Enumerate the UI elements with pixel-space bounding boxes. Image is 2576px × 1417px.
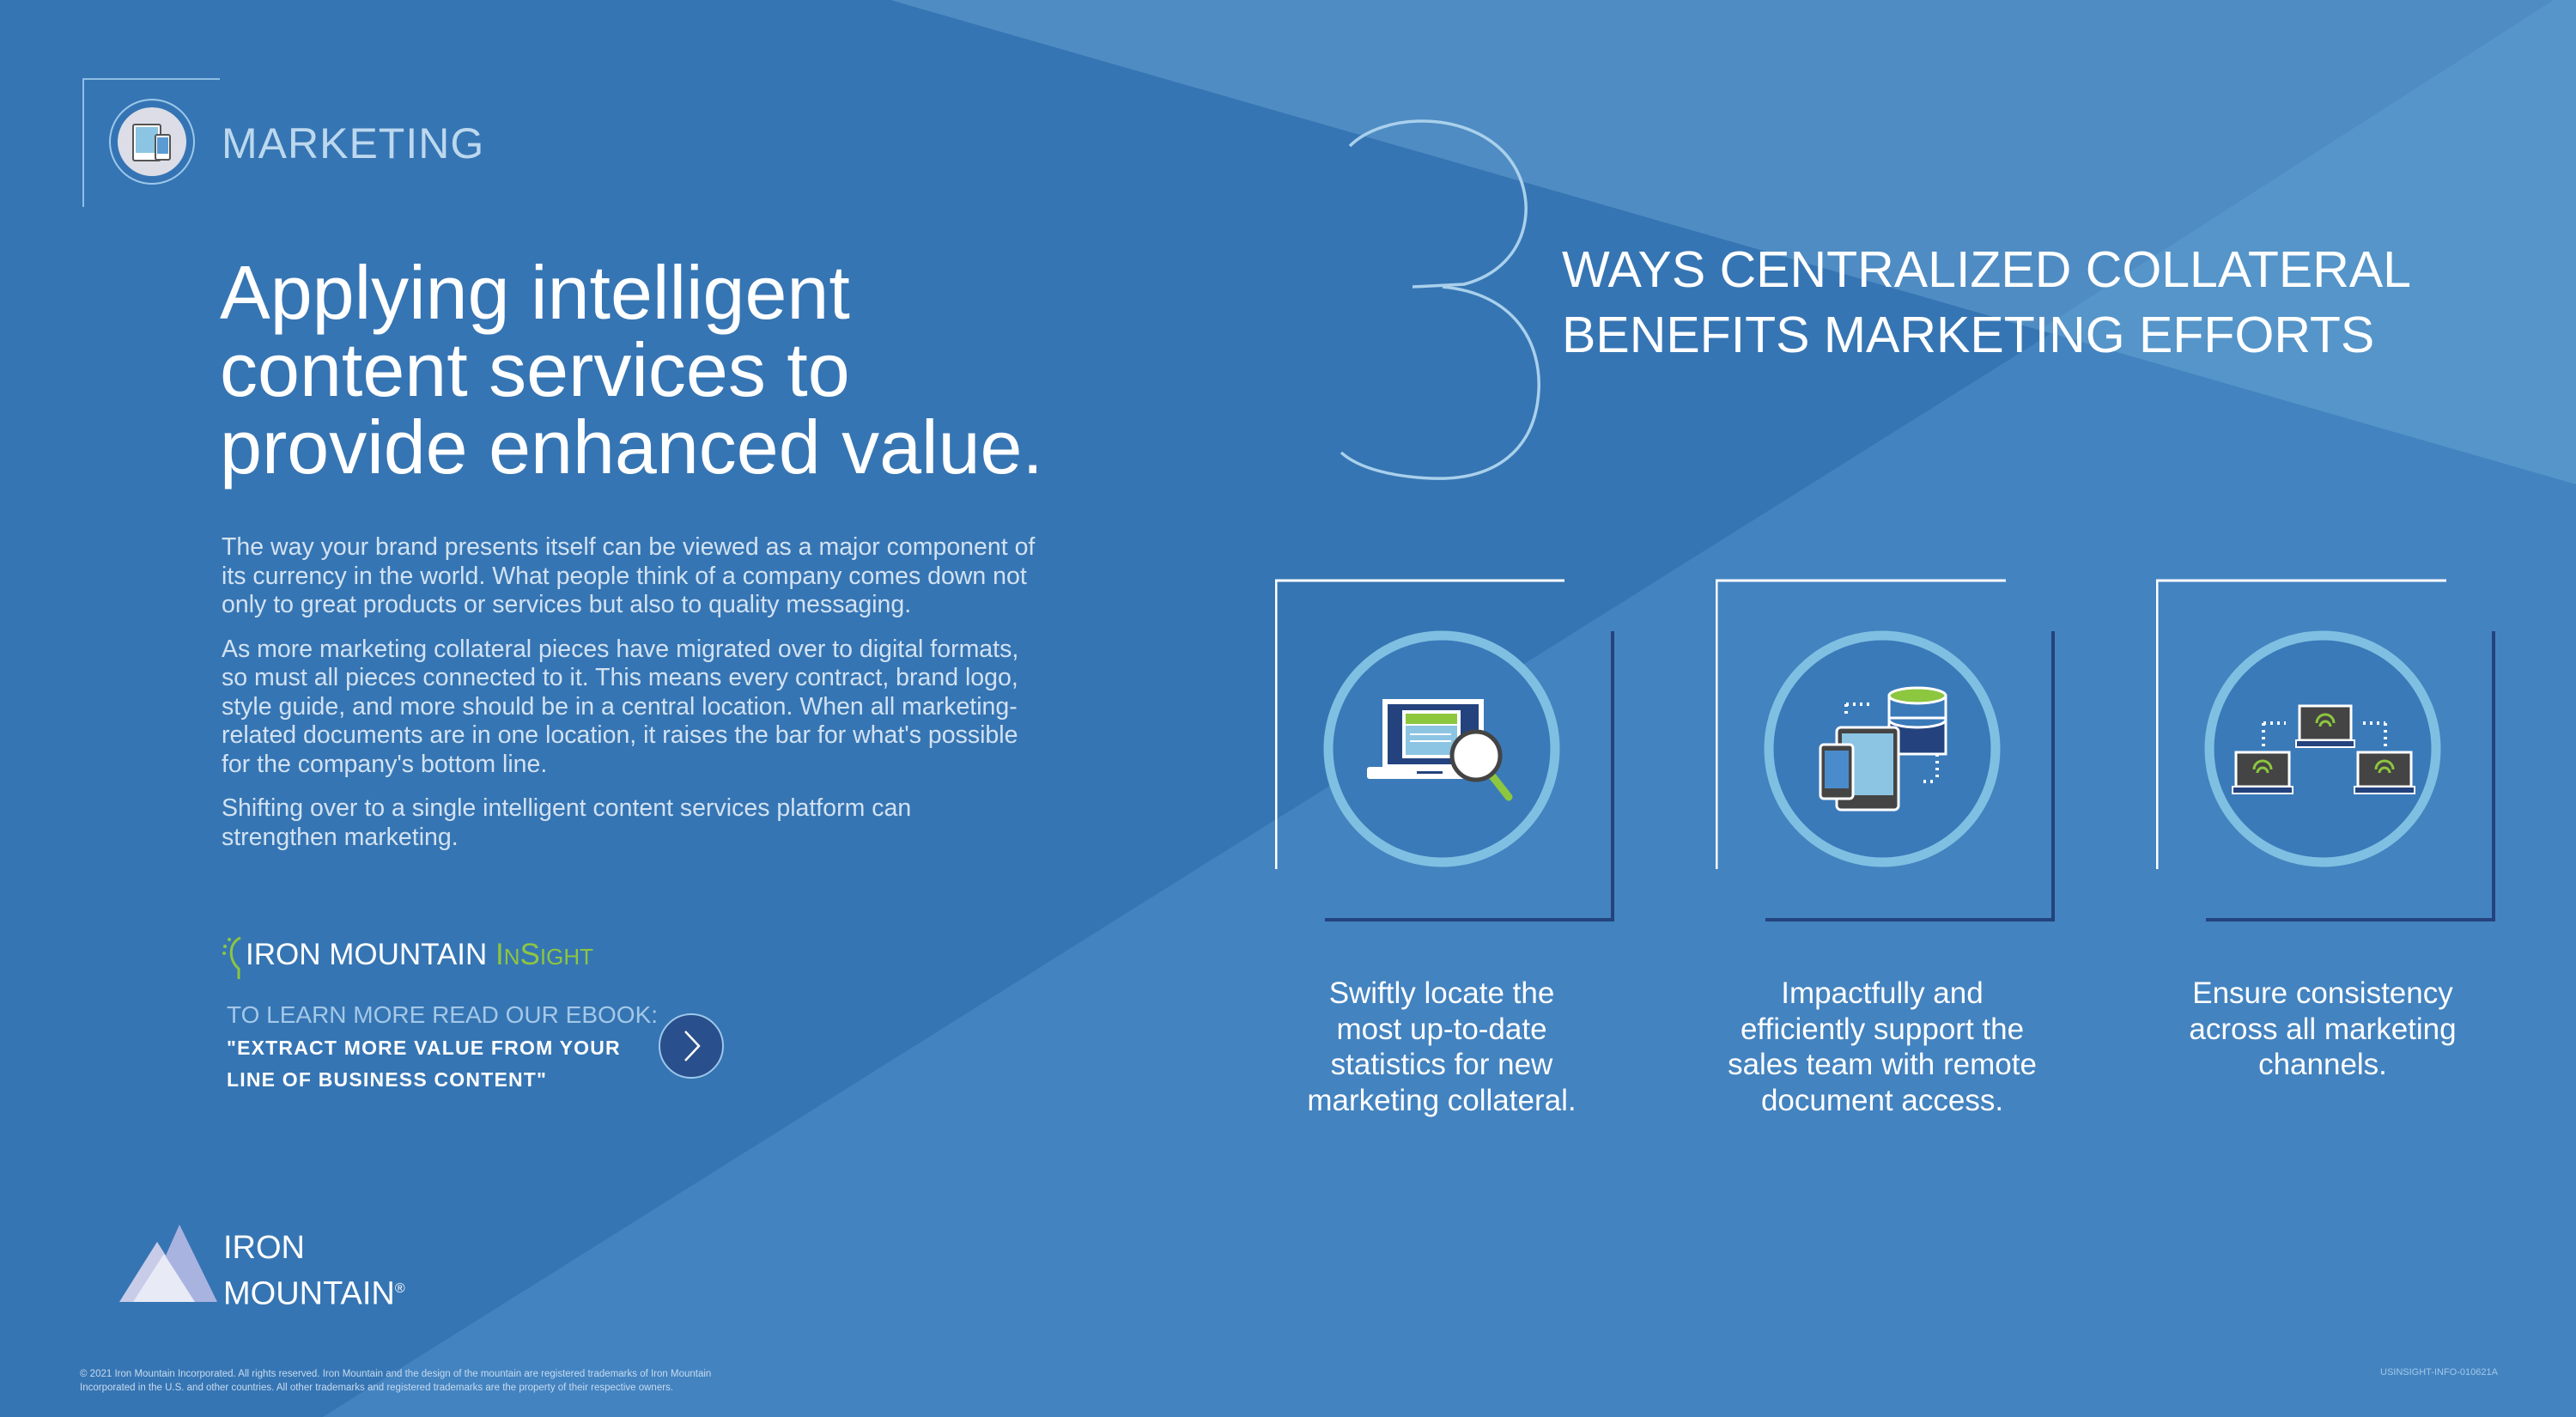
header bracket [82,78,220,207]
body text [222,533,1036,850]
card 1 text [1307,976,1577,1116]
paragraph 2: so must all pieces connected to it. This means every contract, brand logo, [222,664,1018,691]
paragraph 2 [222,636,1018,778]
paragraph 1: only to great products or services but also to quality messaging. [222,591,911,618]
icon: devices and database [1820,688,1946,810]
headline: provide enhanced value. [220,404,1043,490]
headline: content services to [220,327,850,412]
ebook call to action [227,1001,658,1091]
footer legal: © 2021 Iron Mountain Incorporated. All rights reserved. Iron Mountain and the design of the mountain are registered trademarks of Iron Mountain [80,1369,711,1379]
ebook call to action: LINE OF BUSINESS CONTENT" [227,1068,547,1091]
card 3 text [2189,976,2457,1081]
paragraph 2: style guide, and more should be in a central location. When all marketing- [222,692,1018,720]
right title: WAYS CENTRALIZED COLLATERAL [1562,241,2411,298]
ebook call to action: "EXTRACT MORE VALUE FROM YOUR [227,1037,621,1059]
section label: MARKETING [222,119,484,167]
footer legal: Incorporated in the U.S. and other countries. All other trademarks and registered trademarks are the property of their respective owners. [80,1383,673,1393]
card 1 [1275,579,1614,1116]
card 2 [1716,579,2055,1116]
card 3 [2156,579,2495,1081]
card 3 text: Ensure consistency [2192,976,2453,1010]
icon: devices [109,99,195,185]
footer code: USINSIGHT-INFO-010621A [2380,1367,2498,1377]
card 2 text: sales team with remote [1728,1048,2037,1081]
paragraph 3: Shifting over to a single intelligent content services platform can [222,794,911,822]
right title: BENEFITS MARKETING EFFORTS [1562,307,2374,363]
headline: Applying intelligent [220,250,850,335]
arrow button [659,1013,724,1079]
card 1 text: most up-to-date [1336,1012,1547,1046]
insight logo: IRON MOUNTAIN INSIGHT [246,938,593,971]
card 1 text: Swiftly locate the [1329,976,1554,1010]
card 2 text [1728,976,2037,1116]
card 1 text: statistics for new [1331,1048,1552,1081]
card 1 text: marketing collateral. [1307,1084,1577,1116]
card 2 text: efficiently support the [1741,1012,2024,1046]
card 3 text: across all marketing [2189,1012,2457,1046]
paragraph 1: The way your brand presents itself can be viewed as a major component of [222,533,1035,561]
card 2 text: Impactfully and [1781,976,1984,1010]
paragraph 2: for the company's bottom line. [222,751,547,778]
iron mountain logo: MOUNTAIN® [223,1276,405,1312]
right title [1562,241,2411,363]
ebook call to action: TO LEARN MORE READ OUR EBOOK: [227,1001,658,1028]
icon: laptop search [1367,699,1509,797]
paragraph 2: As more marketing collateral pieces have migrated over to digital formats, [222,636,1018,663]
paragraph 2: related documents are in one location, it raises the bar for what's possible [222,721,1018,749]
icon: connected laptops [2233,706,2415,794]
big numeral 3 [1340,119,1540,480]
footer legal [80,1369,711,1393]
paragraph 3: strengthen marketing. [222,823,459,850]
card 3 text: channels. [2258,1048,2387,1081]
iron mountain logo: IRON [223,1230,305,1266]
iron mountain logo [119,1225,405,1312]
card 2 text: document access. [1761,1084,2003,1116]
paragraph 3 [222,794,911,850]
paragraph 1: its currency in the world. What people think of a company comes down not [222,562,1027,589]
headline [220,250,1043,490]
paragraph 1 [222,533,1036,618]
